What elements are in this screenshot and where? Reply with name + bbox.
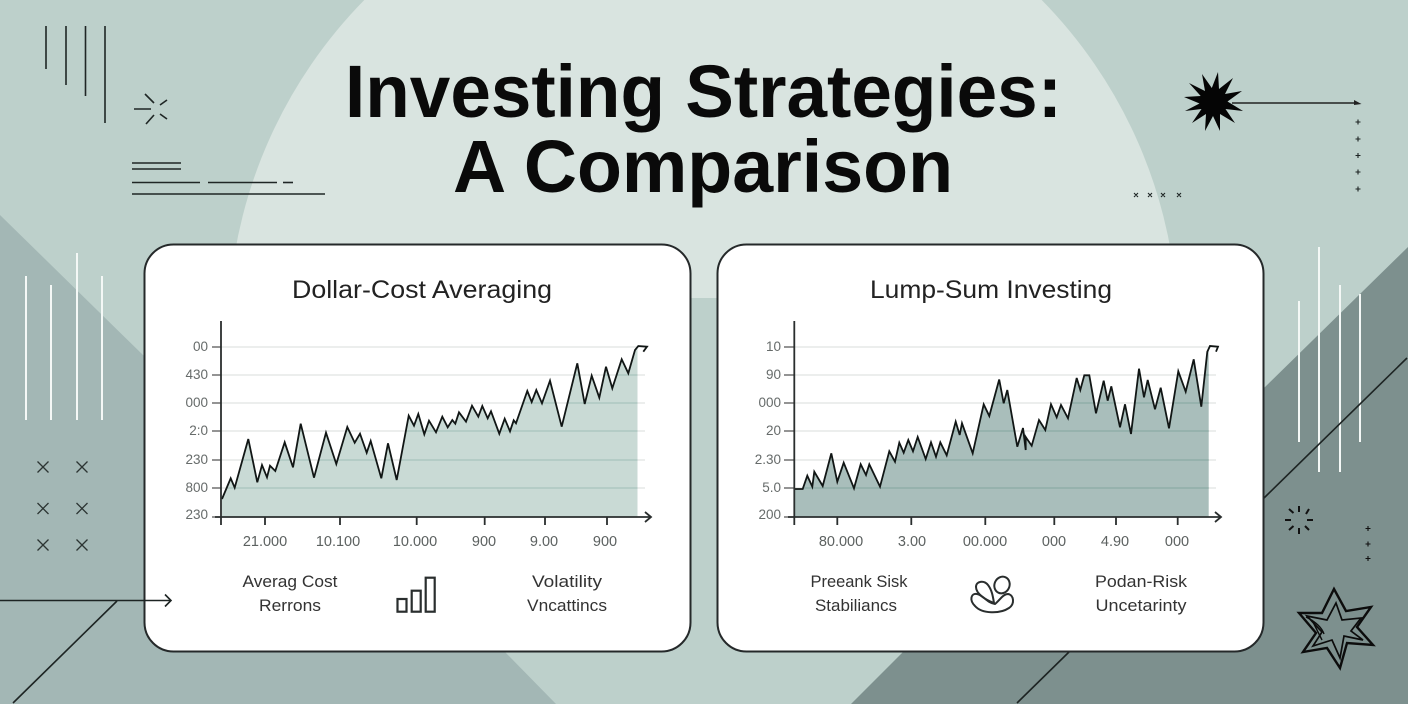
- decoration: bottom-left diagonal line: [13, 601, 117, 703]
- text: right caption: Podan-Risk: [1095, 572, 1188, 591]
- text: left caption: Stabiliancs: [815, 596, 897, 615]
- chart: Lump-Sum Investing: 90: [766, 367, 781, 382]
- decoration: small cross marks: [1134, 193, 1181, 197]
- arrow: from starburst to the right: [1232, 100, 1362, 105]
- text: right caption: [527, 572, 607, 615]
- background shape: lower left: [0, 215, 556, 704]
- chart: Lump-Sum Investing: 000: [1042, 534, 1066, 550]
- text: right caption: [1095, 572, 1188, 615]
- text: left caption: Averag Cost: [242, 572, 338, 591]
- chart: Dollar-Cost Averaging: 900: [593, 534, 617, 550]
- chart: Dollar-Cost Averaging: 230: [185, 507, 208, 522]
- title: A Comparison: [453, 125, 953, 208]
- decoration: right white lines: [1299, 247, 1360, 472]
- decoration: top-left vertical lines: [46, 26, 105, 123]
- decoration: left cross marks: [38, 462, 88, 550]
- chart: Dollar-Cost Averaging: 000: [185, 395, 208, 410]
- chart: Dollar-Cost Averaging: 10.100: [316, 534, 360, 550]
- chart: Lump-Sum Investing: 000: [758, 395, 781, 410]
- decoration: lower right plus marks: [1366, 526, 1370, 561]
- chart: Lump-Sum Investing: [755, 321, 1221, 550]
- chart: Lump-Sum Investing: 000: [1165, 534, 1189, 550]
- decoration: left white lines: [26, 253, 102, 420]
- text: left caption: Rerrons: [259, 596, 321, 615]
- title: [345, 50, 1062, 208]
- decoration: bottom diagonal line: [1017, 652, 1069, 703]
- chart: Lump-Sum Investing: 00.000: [963, 534, 1007, 550]
- chart: Lump-Sum Investing: 20: [766, 423, 781, 438]
- text: right caption: Volatility: [532, 572, 603, 591]
- chart: Dollar-Cost Averaging: 230: [185, 452, 208, 467]
- title: Investing Strategies:: [345, 50, 1062, 133]
- icon: black starburst: [1184, 72, 1243, 131]
- heading: Dollar-Cost Averaging: Dollar-Cost Averaging: [292, 276, 552, 304]
- icon: lower right burst: [1285, 506, 1313, 534]
- chart: Dollar-Cost Averaging: 800: [185, 480, 208, 495]
- chart: Dollar-Cost Averaging: [185, 321, 651, 550]
- text: left caption: Preeank Sisk: [810, 572, 908, 591]
- decoration: top-left burst: [134, 94, 167, 124]
- text: left caption: [810, 572, 908, 615]
- decoration: right plus marks: [1356, 120, 1360, 192]
- chart: Dollar-Cost Averaging: 2:0: [189, 423, 208, 438]
- arrow: left pointing into panel: [0, 594, 171, 606]
- icon: abstract hands and leaf: [971, 574, 1013, 612]
- icon: bar chart: [398, 578, 435, 612]
- chart: Lump-Sum Investing: 5.0: [762, 480, 781, 495]
- chart: Lump-Sum Investing: 10: [766, 339, 781, 354]
- chart: Dollar-Cost Averaging: 9.00: [530, 534, 558, 550]
- chart: Dollar-Cost Averaging: 430: [185, 367, 208, 382]
- text: right caption: Vncattincs: [527, 596, 607, 615]
- background shape: lower right: [851, 247, 1408, 704]
- chart: Lump-Sum Investing: 80.000: [819, 534, 863, 550]
- chart: Lump-Sum Investing: 200: [758, 507, 781, 522]
- chart: Lump-Sum Investing: 4.90: [1101, 534, 1129, 550]
- chart: Lump-Sum Investing: 3.00: [898, 534, 926, 550]
- chart: Lump-Sum Investing: 2.30: [755, 452, 781, 467]
- text: left caption: [242, 572, 338, 615]
- icon: outlined star: [1299, 589, 1373, 668]
- chart: Dollar-Cost Averaging: 10.000: [393, 534, 437, 550]
- chart: Dollar-Cost Averaging: 21.000: [243, 534, 287, 550]
- decoration: top-left horizontal lines: [132, 163, 325, 194]
- chart: Dollar-Cost Averaging: 00: [193, 339, 208, 354]
- background circle: [229, 0, 1177, 298]
- panel: Dollar-Cost Averaging: [144, 244, 690, 652]
- heading: Lump-Sum Investing: Lump-Sum Investing: [870, 276, 1112, 304]
- chart: Dollar-Cost Averaging: 900: [472, 534, 496, 550]
- panel: Lump-Sum Investing: [718, 244, 1264, 652]
- decoration: right diagonal line: [1264, 358, 1407, 498]
- text: right caption: Uncetarinty: [1096, 596, 1187, 615]
